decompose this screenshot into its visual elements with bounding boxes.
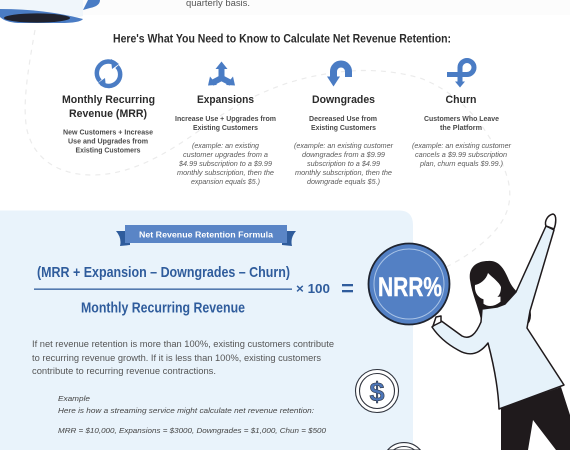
- NRR badge: [368, 244, 450, 324]
- heading: Expansions: Expansions: [197, 94, 254, 106]
- raised hand: [545, 214, 556, 229]
- icon: dollar coin: [356, 370, 398, 412]
- lower hand: [433, 316, 441, 326]
- icon: loop arrow: [447, 61, 474, 88]
- example: Expansions: (example: an existing: [192, 141, 259, 150]
- formula: fraction line: [34, 288, 292, 290]
- icon: u-turn arrow: [327, 64, 348, 86]
- heading: Downgrades: Downgrades: [312, 94, 375, 106]
- description: Downgrades: Existing Customers: [311, 123, 376, 132]
- example: Downgrades: (example: an existing customer: [294, 141, 394, 150]
- heading: MRR: Revenue (MRR): [69, 108, 147, 120]
- description: MRR: Existing Customers: [76, 146, 141, 154]
- icon: dollar coin: $: [369, 377, 385, 407]
- icon: refresh cycle: [97, 59, 120, 88]
- description: Churn: Customers Who Leave: [424, 114, 499, 123]
- panel: formula background: [0, 210, 413, 450]
- illustration: top disc cropped: [0, 0, 100, 23]
- example text: MRR = $10,000, Expansions = $3000, Downgrades = $1,000, Chun = $500: [58, 426, 327, 435]
- description: Downgrades: Decreased Use from: [309, 114, 377, 123]
- formula: numerator: (MRR + Expansion – Downgrades – Churn): [37, 264, 290, 281]
- example text: Here is how a streaming service might calculate net revenue retention:: [58, 406, 314, 415]
- pants: [501, 387, 570, 450]
- icon: three-way arrows: [208, 62, 235, 86]
- example: Expansions: customer upgrades from a: [183, 150, 268, 159]
- hair: [470, 261, 522, 320]
- description: MRR: Use and Upgrades from: [68, 136, 148, 146]
- icon: second coin cropped: [388, 443, 420, 450]
- explanation text: contribute to recurring revenue contractions.: [32, 366, 216, 376]
- example text: Example: [58, 394, 90, 403]
- example: Churn: plan, churn equals $9.99.): [419, 159, 503, 168]
- description: MRR: New Customers + Increase: [63, 128, 153, 136]
- banner: formula title: [116, 225, 296, 246]
- column: MRR: [62, 59, 155, 154]
- example: Downgrades: downgrade equals $5.): [307, 177, 380, 186]
- explanation text: If net revenue retention is more than 100%, existing customers contribute: [32, 339, 334, 349]
- description: Churn: the Platform: [440, 123, 482, 132]
- heading: Here's What You Need to Know to Calculate Net Revenue Retention:: [113, 32, 451, 46]
- column: Expansions: [175, 62, 276, 186]
- body and arms: [432, 226, 564, 409]
- hair behind arm: [523, 306, 531, 324]
- example: Downgrades: downgrades from a $9.99: [302, 150, 385, 159]
- NRR badge: NRR%: [378, 272, 442, 302]
- explanation text: to recurring revenue growth. If it is less than 100%, existing customers: [32, 353, 322, 363]
- example: Downgrades: subscription to a $4.99: [307, 159, 380, 168]
- description: Expansions: Existing Customers: [193, 123, 258, 132]
- example: Churn: (example: an existing customer: [412, 141, 512, 150]
- formula: equals: [342, 284, 353, 292]
- heading: Churn: Churn: [446, 94, 477, 106]
- formula: times 100: × 100: [296, 281, 330, 296]
- face: [475, 273, 501, 300]
- column: Downgrades: [294, 64, 394, 186]
- example: Expansions: expansion equals $5.): [191, 177, 260, 186]
- neck: [483, 296, 501, 307]
- formula: denominator: Monthly Recurring Revenue: [81, 300, 245, 316]
- example: Expansions: monthly subscription, then the: [177, 168, 274, 177]
- banner: formula title: Net Revenue Retention Formula: [139, 230, 274, 240]
- example: Downgrades: monthly subscription, then the: [295, 168, 392, 177]
- example: Churn: cancels a $9.99 subscription: [415, 150, 507, 159]
- column: Churn: [412, 61, 512, 168]
- description: Expansions: Increase Use + Upgrades from: [175, 114, 276, 123]
- heading: MRR: Monthly Recurring: [62, 94, 155, 106]
- person illustration: [432, 214, 570, 450]
- example: Expansions: $4.99 subscription to a $9.99: [178, 159, 272, 168]
